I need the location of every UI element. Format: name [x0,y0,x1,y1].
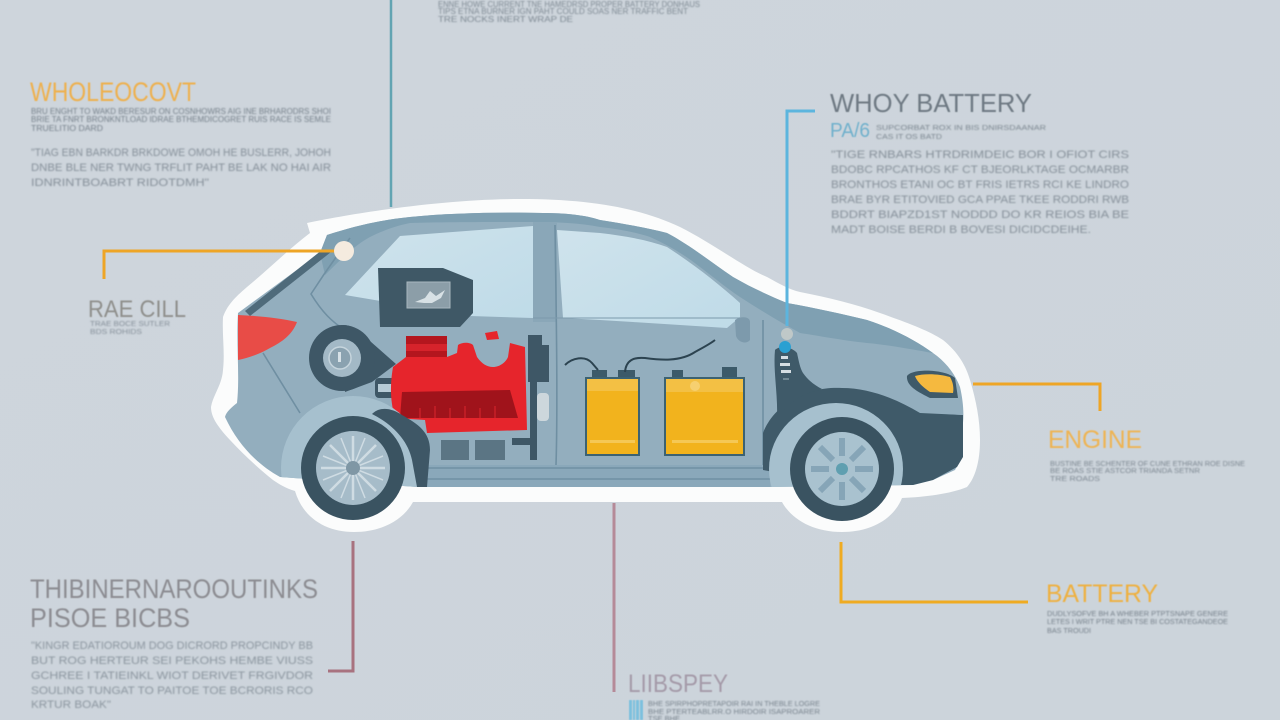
front arch dark [763,388,963,485]
text block: top fragment: ENNE HOWE CURRENT TNE HAMEDRSD PROPER BATTERY DONHAUS [438,0,700,9]
text block: top-left paragraph: IDNRINTBOABRT RIDOTDMH" [31,177,209,189]
front window [557,230,740,328]
text block: why battery paragraph: MADT BOISE BERDI B BOVESI DICIDCDEIHE. [831,224,1091,236]
text block: engine note: BUSTINE BE SCHENTER OF CUNE ETHRAN ROE DISNE [1050,459,1245,468]
front wheel [790,417,894,521]
connector: engine line [973,384,1100,411]
text block: bottom-left paragraph: KRTUR BOAK" [31,699,111,711]
B pillar [533,222,557,322]
heading: bottom-left [30,574,318,633]
car body [225,213,963,487]
text block: bottom-left paragraph: "KINGR EDATIOROUM DOG DICRORD PROPCINDY BB [31,640,313,652]
text block: why battery paragraph: "TIGE RNBARS HTRDRIMDEIC BOR I OFIOT CIRS [831,149,1129,161]
car white outline [211,199,980,532]
icon: blue label: PA/6 [830,120,870,142]
text block: battery note [1047,609,1228,635]
panel: why battery text [830,88,1129,236]
rear arch dark piece [372,409,430,487]
text block: centre bottom note: BHE PTERTEABLRR.O HIRDOIR ISAPROARER [648,707,821,716]
text block: bottom-left paragraph: SOULING TUNGAT TO PAITOE TOE BCRORIS RCO [31,685,313,697]
rear wheel arch [281,396,417,487]
spare wheel and belt [309,325,396,392]
heading: bottom-left: THIBINERNAROOUTINKS [30,574,318,604]
text block: top-left paragraph: "TIAG EBN BARKDR BRKDOWE OMOH HE BUSLERR, JOHOH [31,147,331,159]
text block: battery note: BAS TROUDI [1047,626,1091,635]
icon: blue bars [629,700,643,720]
text block: battery note: LETES I WRIT PTRE NEN TSE BI COSTATEGANDEOE [1047,617,1228,626]
connector: battery line [841,542,1028,602]
text block: why battery paragraph: BRONTHOS ETANI OC BT FRIS IETRS RCI KE LINDRO [831,179,1129,191]
text block: why battery intro [876,123,1047,141]
vents [441,440,505,460]
panel: centre bottom text [628,670,821,720]
panel: top-left text [30,77,331,189]
body panel lines [263,225,763,470]
rear window strip [245,250,331,316]
taillight [238,315,297,360]
battery left [586,370,639,455]
front wheel arch [769,403,903,487]
text block: rae cill note [90,321,170,336]
heading: bottom-left: PISOE BICBS [30,603,190,633]
text block: why battery paragraph: BDOBC RPCATHOS KF CT BJEORLKTAGE OCMARBR [831,164,1129,176]
text block: bottom-left paragraph [31,640,313,711]
rear window [345,226,533,318]
headlight [907,371,958,398]
engine bracket [512,335,549,460]
rear wheel [301,416,405,520]
engine pipe [375,378,397,398]
text block: top-left paragraph [31,147,331,189]
panel: rae cill text [88,296,186,336]
heading: why battery: WHOY BATTERY [830,88,1032,118]
text block: why battery paragraph: BRAE BYR ETITOVIED GCA PPAE TKEE RODDRI RWB [831,194,1129,206]
text block: top fragment [438,0,700,24]
connector: bottom-left mauve line [328,541,353,671]
connector: rear orange line [104,251,338,279]
text block: rae cill note: TRAE BOCE SUTLER [90,321,170,328]
text block: why battery paragraph [831,149,1129,236]
text block: battery note: DUDLYSOFVE BH A WHEBER PTPTSNAPE GENERE [1047,609,1228,618]
text block: rae cill note: BDS ROHIDS [90,329,142,336]
panel: engine text [1048,426,1245,483]
rocker panel [425,465,770,487]
text block: top-left intro [31,107,331,133]
heading: centre bottom: LIIBSPEY [628,670,728,698]
text block: bottom-left paragraph: GCHREE I TATIEINKL WIOT DERIVET FRGIVDOR [31,670,313,682]
heading: top-left: WHOLEOCOVT [30,77,196,107]
text block: bottom-left paragraph: BUT ROG HERTEUR SEI PEKOHS HEMBE VIUSS [31,655,313,667]
key fob shape [775,347,822,418]
door handle mirror [735,317,750,343]
car illustration [211,199,980,540]
text block: top-left intro: BRIE TA FNRT BRONKNTLOAD IDRAE BTHEMDICOGRET RUIS RACE IS SEMLE [31,115,331,124]
text block: engine note [1050,459,1245,483]
text block: top fragment: TRE NOCKS INERT WRAP DE [438,15,573,24]
panel: bottom-left text [30,574,318,711]
connector: blue line [787,111,815,326]
heading: battery: BATTERY [1046,580,1158,608]
text block: engine note: TRE ROADS [1050,474,1100,483]
text block: engine note: BE ROAS STIE ASTCOR TRIANDA SETNR [1050,466,1201,475]
connector: top teal line [390,0,392,207]
connector: centre mauve line [612,503,616,692]
connector dots: hood [779,328,793,353]
panel: battery text [1046,580,1228,635]
connector dot: rear [334,241,354,261]
engine red block [391,331,527,433]
text block: centre bottom note [648,699,821,720]
battery right [665,367,744,455]
bumper light strip [945,398,963,415]
text block: why battery paragraph: BDDRT BIAPZD1ST NODDD DO KR REIOS BIA BE [831,209,1129,221]
text block: top-left intro: BRU ENGHT TO WAKD BERESUR ON COSNHOWRS AIG INE BRHARODRS SHOI [31,107,331,116]
display module [378,268,473,327]
text block: top fragment: TIPS ETNA BURNER IGN PAHT COULD SOAS NER TRAFFIC BENT [438,7,688,16]
heading: rae cill: RAE CILL [88,296,186,323]
heading: engine: ENGINE [1048,426,1142,454]
text block: top-left paragraph: DNBE BLE NER TWNG TRFLIT PAHT BE LAK NO HAI AIR [31,162,331,174]
battery wires [565,340,715,372]
text block: centre bottom note: BHE SPIRPHOPRETAPOIR RAI IN THEBLE LOGRE [648,699,820,708]
text block: top-left intro: TRUELITIO DARD [31,124,103,133]
roof band [320,213,933,353]
text block: why battery intro: SUPCORBAT ROX IN BIS DNIRSDAANAR [876,123,1047,132]
text block: why battery intro: CAS IT OS BATD [876,132,943,141]
